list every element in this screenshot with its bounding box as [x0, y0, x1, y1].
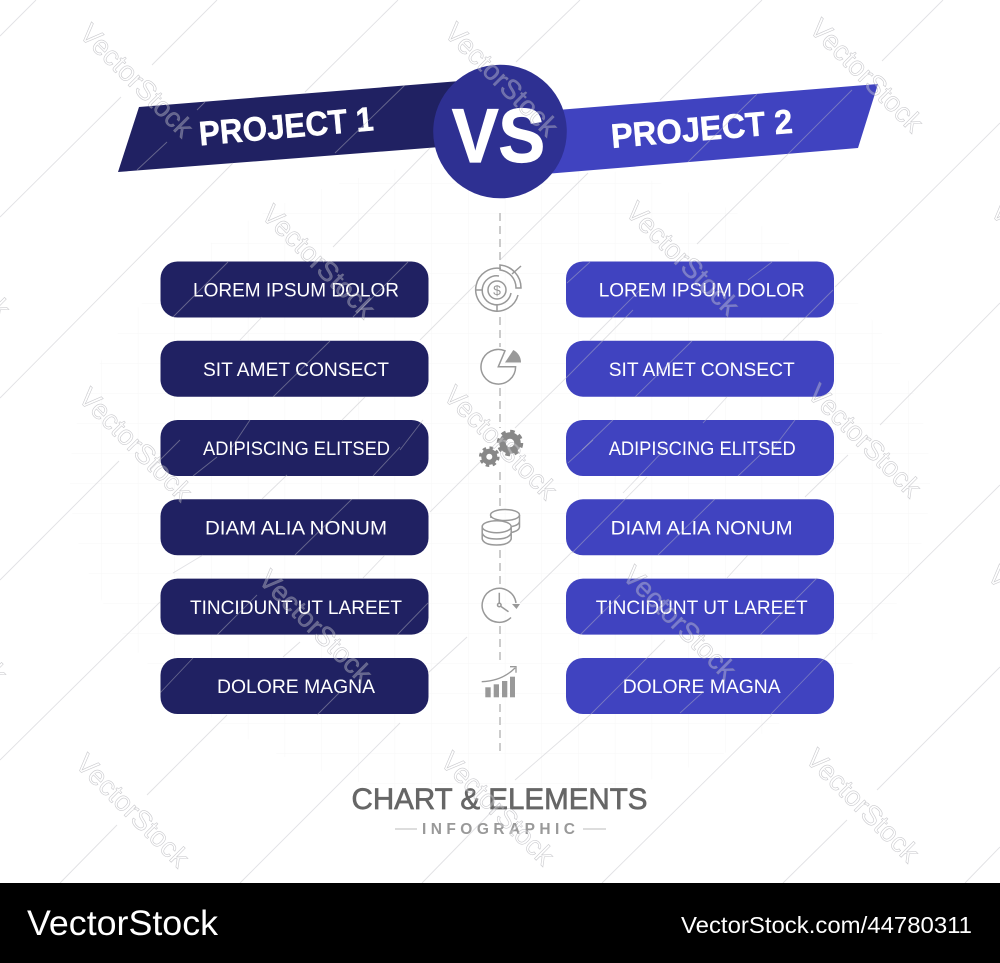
item: tincidunt ut lareet: [160, 579, 428, 635]
watermarks: VectorStock: [438, 380, 564, 505]
watermarks: VectorStock: [617, 560, 743, 685]
item: diam alia nonum: [566, 499, 834, 555]
footer image id: VectorStock.com/44780311: [681, 912, 972, 938]
item: lorem ipsum dolor: LOREM IPSUM DOLOR: [193, 280, 399, 302]
item: sit amet consect: SIT AMET CONSECT: [203, 359, 389, 381]
footer title: CHART & ELEMENTS: [352, 783, 648, 816]
icon: coin stacks: [482, 510, 520, 545]
vs badge: VS: [452, 94, 545, 179]
item: dolore magna: [160, 658, 428, 714]
banner: project 2: [545, 84, 878, 174]
item: adipiscing elitsed: [160, 420, 428, 476]
item: adipiscing elitsed: ADIPISCING ELITSED: [609, 438, 796, 460]
banner label: project 1: PROJECT 1: [197, 100, 375, 153]
subtitle: INFOGRAPHIC: [422, 821, 575, 838]
watermarks: VectorStock: [804, 13, 930, 138]
footer logo: VectorStock: [27, 904, 219, 943]
footer title: [352, 783, 648, 838]
item: tincidunt ut lareet: TINCIDUNT UT LAREET: [190, 597, 402, 619]
item: lorem ipsum dolor: [160, 262, 428, 318]
watermarks: VectorStock: [253, 564, 379, 689]
item: tincidunt ut lareet: [566, 579, 834, 635]
item: adipiscing elitsed: ADIPISCING ELITSED: [203, 438, 390, 460]
item: dolore magna: [566, 658, 834, 714]
watermarks: VectorStock: [70, 748, 196, 873]
icon: clock: [482, 588, 520, 622]
banner: project 1: [118, 81, 460, 172]
item: diam alia nonum: [160, 499, 428, 555]
column: project 1 items: [160, 262, 428, 714]
item: lorem ipsum dolor: LOREM IPSUM DOLOR: [599, 280, 805, 302]
icon: dollar target: [476, 265, 521, 312]
icon: pie chart: [481, 349, 521, 384]
item: diam alia nonum: DIAM ALIA NONUM: [205, 518, 387, 540]
item: lorem ipsum dolor: [566, 262, 834, 318]
icon: dollar target: $: [493, 282, 501, 298]
watermarks: VectorStock: [73, 382, 199, 507]
item: sit amet consect: [160, 341, 428, 397]
watermarks: VectorStock: [439, 17, 565, 142]
icon: gears: [480, 432, 522, 466]
item: dolore magna: DOLORE MAGNA: [623, 676, 781, 698]
center dashed divider: [499, 213, 501, 752]
footer bar: [0, 883, 1000, 963]
item: tincidunt ut lareet: TINCIDUNT UT LAREET: [596, 597, 808, 619]
watermarks: VectorStock: [256, 199, 382, 324]
item: adipiscing elitsed: [566, 420, 834, 476]
column: project 2 items: [566, 262, 834, 714]
vs badge: [433, 65, 567, 198]
item: diam alia nonum: DIAM ALIA NONUM: [611, 518, 793, 540]
item: sit amet consect: SIT AMET CONSECT: [609, 359, 795, 381]
icon: growth chart: [482, 667, 516, 697]
banner label: project 2: PROJECT 2: [609, 103, 794, 156]
watermarks: VectorStock: [435, 746, 561, 871]
watermarks: VectorStock: [802, 378, 928, 503]
item: sit amet consect: [566, 341, 834, 397]
watermarks: VectorStock: [74, 18, 200, 143]
item: dolore magna: DOLORE MAGNA: [217, 676, 375, 698]
watermarks: VectorStock: [800, 743, 926, 868]
watermarks: VectorStock: [620, 196, 746, 321]
